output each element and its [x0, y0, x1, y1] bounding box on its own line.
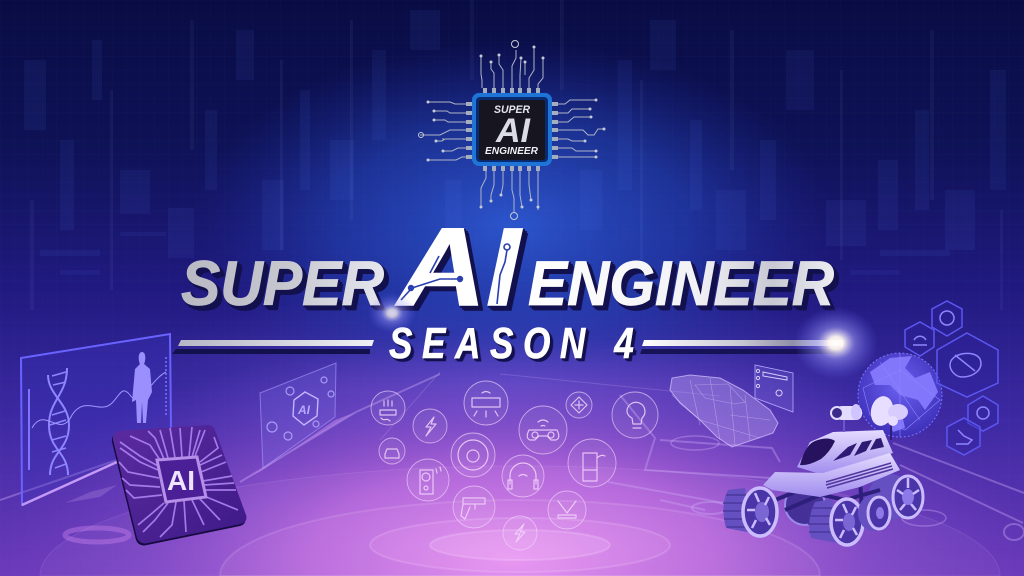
side stripes [826, 463, 893, 488]
text: SUPER: SUPER [181, 249, 384, 319]
icon: game controller [519, 406, 567, 454]
hex: right [968, 396, 998, 431]
icon: DNA helix [48, 368, 69, 475]
logo text: ENGINEER: ENGINEER [485, 145, 538, 157]
icon: headphones [502, 455, 544, 497]
hex: lower [947, 418, 980, 455]
mast and camera [831, 404, 892, 440]
icon: refrigerator [568, 439, 616, 487]
hex: top [932, 301, 962, 336]
icon: AI microchip [112, 425, 246, 545]
text: ENGINEER: ENGINEER [528, 249, 834, 319]
divider line: right [640, 340, 843, 354]
chassis struts [775, 480, 880, 510]
logo text: AI: AI [495, 112, 532, 150]
rear hidden wheel [785, 485, 825, 525]
text: AI: AI [395, 206, 523, 329]
front wheel [723, 488, 777, 536]
panel: DNA and human hologram [21, 334, 171, 505]
icon: drone [548, 491, 586, 529]
lower body [763, 453, 900, 497]
icon: rover [723, 394, 923, 545]
floor ripples [40, 466, 1000, 576]
icon: hub [566, 392, 592, 418]
satellite dish [868, 394, 908, 428]
panel: AI tablet hologram [240, 363, 356, 482]
panel: smart device icons [371, 381, 658, 550]
label: AI: AI [297, 403, 311, 417]
subtitle: SEASON 4: SEASON 4 [389, 319, 634, 368]
title: SUPER AI ENGINEER [181, 206, 834, 329]
light flare: left [368, 293, 416, 333]
rear wheel [868, 474, 923, 520]
windshield [800, 438, 835, 465]
small wheel [858, 495, 890, 531]
panel: wireframe car [670, 365, 793, 447]
panel: car readout [755, 365, 793, 412]
logo text: SUPER: SUPER [494, 104, 530, 116]
divider line: left [172, 340, 374, 354]
icon: robot vacuum [451, 433, 495, 477]
wave line [32, 372, 166, 428]
panel: hexagon icons [905, 301, 998, 455]
label: AI: AI [167, 465, 195, 496]
icon: human figure [132, 352, 152, 423]
icon: robot arm [453, 486, 495, 528]
hex: large [937, 333, 998, 397]
side windows [833, 438, 884, 461]
icon: energy bolt [503, 516, 537, 550]
middle wheel [808, 499, 863, 545]
icon: speaker [407, 459, 449, 501]
small logo: chip [418, 40, 606, 220]
hex: upper left [905, 322, 934, 356]
icon: globe [858, 353, 942, 437]
icon: car [379, 438, 405, 464]
icon: air conditioner [464, 381, 508, 425]
icon: light bulb [612, 392, 658, 438]
light flare: right [794, 307, 878, 379]
icon: network gateway [371, 391, 405, 425]
floor circuit lines [0, 372, 1024, 542]
icon: bolt [413, 409, 447, 443]
cabin [797, 430, 893, 475]
